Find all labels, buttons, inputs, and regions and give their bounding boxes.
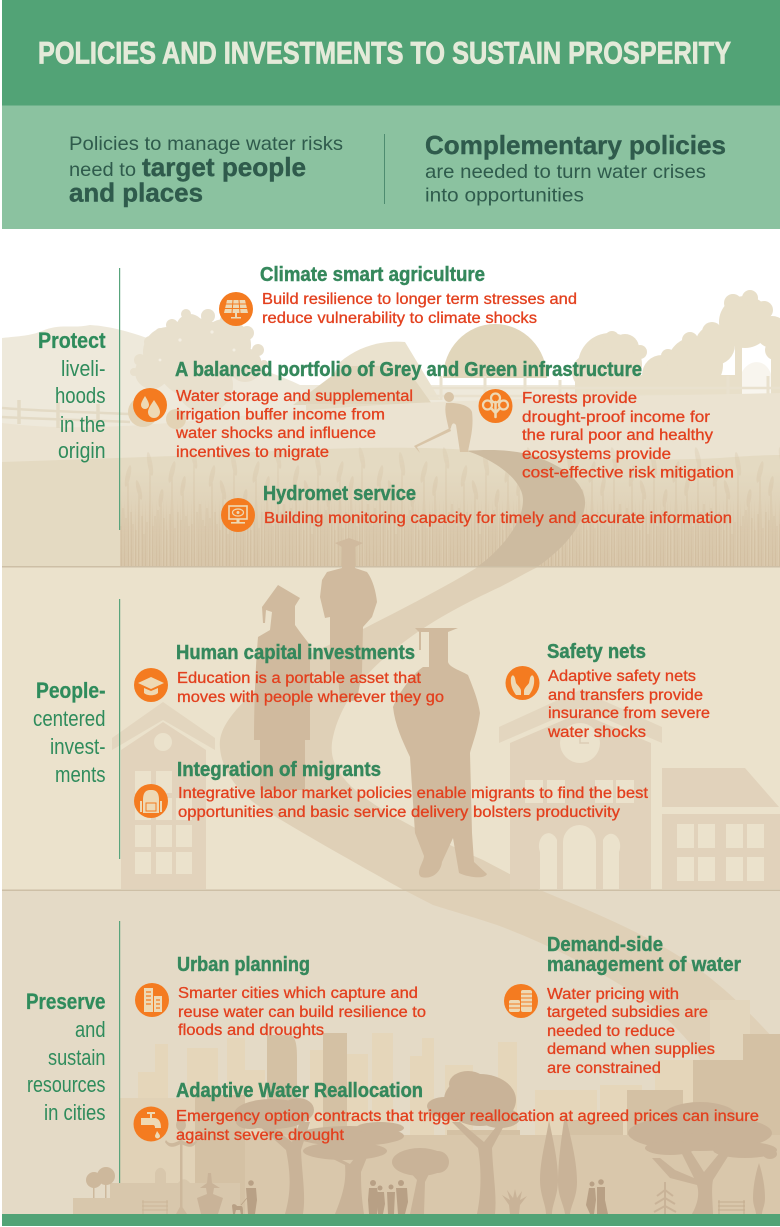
intro left text: and places <box>69 178 203 208</box>
item: human capital investments <box>176 642 444 706</box>
icon: monitor with eye <box>221 498 255 532</box>
intro left text: need to <box>69 159 136 181</box>
item: grey and green infrastructure: Water storage and supplemental <box>176 388 413 405</box>
section label: preserve: in cities <box>44 1100 106 1125</box>
cypress trees <box>540 1113 765 1214</box>
bench left <box>142 1200 168 1214</box>
icon: solar panel <box>219 292 253 326</box>
panel: protect livelihoods <box>38 264 734 532</box>
item: demand-side management: Demand-side <box>547 934 663 956</box>
section backgrounds: people and cities <box>2 568 780 1215</box>
item: safety nets <box>547 641 710 741</box>
item: urban planning: floods and droughts <box>178 1022 324 1039</box>
item: grey and green infrastructure: A balanced portfolio of Grey and Green infrastructure <box>175 359 642 381</box>
item: grey and green infrastructure: incentives to migrate <box>176 444 329 461</box>
man and dog <box>232 1180 257 1214</box>
tree big centre <box>427 1071 520 1214</box>
item: hydromet service: Building monitoring capacity for timely and accurate information <box>264 510 732 527</box>
intro right text: Complementary policies <box>425 130 726 160</box>
section label: protect: liveli- <box>61 356 106 381</box>
icon: water tap <box>134 1106 168 1142</box>
intro right text: into opportunities <box>425 184 584 206</box>
section label: preserve: sustain <box>48 1045 106 1070</box>
item: demand-side management: Water pricing with <box>547 986 679 1003</box>
section label: protect <box>38 328 106 463</box>
item: grey and green infrastructure: cost-effective risk mitigation <box>522 464 734 482</box>
item: human capital investments: Education is a portable asset that <box>177 670 422 687</box>
item: demand-side management <box>547 934 741 1077</box>
item: demand-side management: management of water <box>547 954 741 976</box>
footer band <box>2 1214 780 1226</box>
item: grey and green infrastructure: drought-proof income for <box>522 409 710 426</box>
lamp post <box>165 1119 197 1214</box>
item: demand-side management: needed to reduce <box>547 1023 675 1040</box>
icon: coin stacks <box>504 984 538 1018</box>
illustration: hut <box>293 342 440 474</box>
section label: people: ments <box>55 762 106 787</box>
illustration: farm landscape <box>2 290 780 568</box>
intro left text: target people <box>142 152 306 182</box>
couple <box>586 1179 608 1214</box>
illustration: park trees <box>234 1071 777 1214</box>
item: safety nets: water shocks <box>547 724 646 741</box>
item: urban planning: Smarter cities which capture and <box>178 985 418 1002</box>
section label: preserve: and <box>75 1017 106 1042</box>
item: urban planning: Urban planning <box>177 954 310 976</box>
illustration: right houses <box>499 690 780 889</box>
tree small <box>392 1148 449 1214</box>
graduate front <box>393 628 487 878</box>
bench right <box>718 1200 745 1214</box>
section label: protect: hoods <box>55 383 106 408</box>
item: safety nets: Adaptive safety nets <box>548 668 696 685</box>
intro right text: are needed to turn water crises <box>425 161 706 183</box>
item: human capital investments: Human capital investments <box>176 642 415 664</box>
illustration: park details <box>142 1119 745 1214</box>
icon: tree <box>478 389 512 423</box>
section label: protect: Protect <box>38 328 106 353</box>
item: urban planning: reuse water can build resilience to <box>178 1004 426 1021</box>
icon: backpack <box>134 784 168 818</box>
fern <box>654 1182 676 1214</box>
illustration: city skyline <box>73 1000 780 1214</box>
section label: preserve <box>26 989 106 1125</box>
item: integration of migrants: Integrative labor market policies enable migrants to find the best <box>178 785 649 802</box>
item: grey and green infrastructure <box>175 359 734 482</box>
item: grey and green infrastructure: ecosystems provide <box>522 446 671 463</box>
fountain <box>197 1173 223 1214</box>
item: adaptive water reallocation: against severe drought <box>176 1127 345 1144</box>
tree umbrella right <box>628 1102 777 1214</box>
item: integration of migrants: Integration of migrants <box>177 759 381 781</box>
item: hydromet service: Hydromet service <box>263 483 416 505</box>
icon: city buildings <box>135 983 169 1017</box>
illustration: graduates <box>254 538 487 878</box>
item: climate smart agriculture: reduce vulnerability to climate shocks <box>262 310 537 327</box>
section label: people: invest- <box>50 734 106 759</box>
item: adaptive water reallocation <box>176 1080 759 1144</box>
bush <box>502 1189 527 1214</box>
item: integration of migrants: opportunities and basic service delivery bolsters productivity <box>178 804 620 821</box>
panel: people-centered investments <box>33 599 710 859</box>
item: safety nets: and transfers provide <box>548 687 703 704</box>
item: adaptive water reallocation: Adaptive Water Reallocation <box>176 1080 423 1102</box>
section label: preserve: resources <box>27 1072 106 1097</box>
graduate back <box>320 538 377 703</box>
tree left <box>234 1098 314 1214</box>
intro left text <box>69 133 343 208</box>
item: hydromet service <box>263 483 732 527</box>
item: integration of migrants <box>177 759 649 821</box>
item: grey and green infrastructure: irrigation buffer income from <box>176 406 385 424</box>
illustration: winding road <box>220 568 780 1110</box>
section label: protect: origin <box>58 438 106 463</box>
item: climate smart agriculture: Climate smart agriculture <box>260 264 485 286</box>
illustration: left house <box>112 702 215 889</box>
item: demand-side management: targeted subsidies are <box>547 1004 708 1021</box>
item: safety nets: Safety nets <box>547 641 646 663</box>
item: grey and green infrastructure: Forests provide <box>522 390 637 407</box>
intro band <box>2 106 780 229</box>
icon: water drops <box>133 388 167 422</box>
item: adaptive water reallocation: Emergency option contracts that trigger reallocation at agreed prices can insure <box>176 1108 759 1125</box>
item: urban planning <box>177 954 426 1039</box>
item: climate smart agriculture: Build resilience to longer term stresses and <box>262 291 577 308</box>
item: demand-side management: are constrained <box>547 1060 661 1077</box>
section label: people: centered <box>33 706 106 731</box>
item: safety nets: insurance from severe <box>548 705 710 722</box>
item: grey and green infrastructure: water shocks and influence <box>175 425 376 442</box>
section label: protect: in the <box>60 412 106 437</box>
title banner <box>2 0 780 106</box>
item: grey and green infrastructure: the rural poor and healthy <box>522 427 713 444</box>
graduate left <box>254 585 310 790</box>
tree middle <box>296 1122 404 1214</box>
section label: preserve: Preserve <box>26 989 106 1014</box>
section label: people: People- <box>36 678 106 703</box>
section label: people <box>33 678 106 787</box>
panel: preserve resources in cities <box>26 921 759 1183</box>
icon: graduation cap <box>134 668 168 702</box>
item: climate smart agriculture <box>260 264 577 327</box>
intro right text <box>425 130 726 206</box>
illustration: farmer <box>414 392 473 453</box>
family <box>368 1180 408 1214</box>
icon: caring hands <box>506 666 540 700</box>
item: human capital investments: moves with people wherever they go <box>177 689 444 706</box>
intro left text: Policies to manage water risks <box>69 133 343 155</box>
item: demand-side management: demand when supplies <box>547 1041 715 1058</box>
